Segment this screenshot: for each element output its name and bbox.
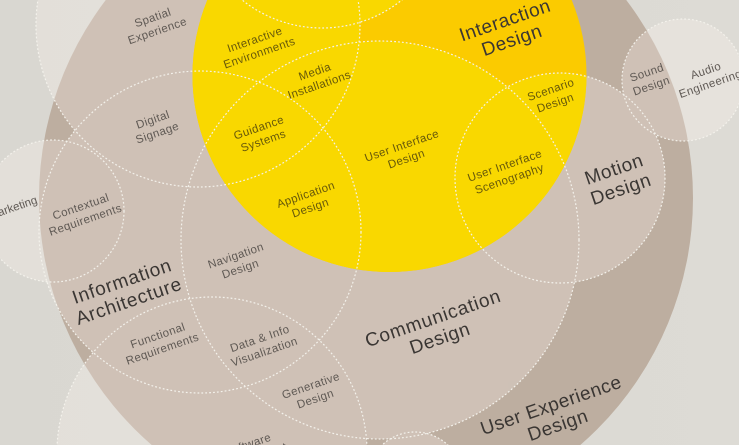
- label: Sound Design: [627, 61, 672, 98]
- label: Generative Design: Generative: [281, 371, 341, 402]
- label: Communication Design: Communication: [362, 286, 504, 352]
- circle: Interaction Design yellow: [192, 0, 586, 272]
- label: Interactive Environments: Interactive: [226, 25, 284, 55]
- label: Navigation Design: [207, 241, 270, 285]
- label: Generative Design: [281, 371, 346, 415]
- label: Spatial Experience: Spatial: [133, 6, 173, 30]
- label: Contextual Requirements: Contextual: [51, 192, 111, 223]
- label: Guidance Systems: [232, 114, 290, 156]
- label: Information Architecture: [66, 254, 185, 330]
- label: Interaction Design: Design: [479, 21, 545, 61]
- label: Spatial Experience: Experience: [127, 16, 189, 47]
- label: Data & Info Visualization: [225, 322, 299, 370]
- label: Contextual Requirements: [43, 189, 124, 239]
- label: User Interface Design: User Interface: [363, 128, 441, 165]
- label: User Interface Scenography: Scenography: [474, 162, 546, 197]
- label: Interaction Design: [457, 0, 561, 66]
- label: Media Installations: [282, 56, 353, 102]
- label: Interactive Environments: [218, 22, 297, 71]
- label: Data & Info Visualization: Data & Info: [229, 324, 291, 355]
- label: Scenario Design: Scenario: [526, 77, 576, 104]
- label: Sound Design: Sound: [628, 62, 666, 85]
- label: Digital Signage: Digital: [135, 109, 171, 132]
- label: Functional Requirements: Requirements: [125, 331, 201, 368]
- label: Scenario Design: Design: [536, 92, 576, 115]
- label: Media Installations: Installations: [286, 69, 353, 102]
- label: User Experience Design: User Experience: [478, 372, 625, 440]
- label: Software Development: [212, 428, 289, 445]
- label: Digital Signage: Signage: [134, 121, 181, 147]
- label: Application Design: Application: [275, 180, 337, 211]
- label: Navigation Design: Navigation: [207, 241, 266, 271]
- label: Generative Design: Design: [296, 388, 336, 411]
- label: Functional Requirements: Functional: [129, 321, 187, 351]
- label: Motion Design: [581, 150, 654, 210]
- label: Communication Design: Design: [407, 319, 473, 359]
- label: Application Design: Design: [291, 197, 331, 220]
- label: Functional Requirements: [120, 318, 201, 368]
- label: User Experience Design: Design: [525, 406, 591, 445]
- label: User Interface Scenography: [466, 148, 548, 198]
- label: Data & Info Visualization: Visualization: [230, 336, 299, 370]
- label: Contextual Requirements: Requirements: [48, 202, 124, 239]
- label: User Interface Design: [363, 128, 445, 178]
- label: Spatial Experience: [122, 3, 189, 47]
- label: Motion Design: Design: [588, 170, 654, 210]
- label: Sound Design: Design: [632, 75, 672, 98]
- label: User Interface Design: Design: [387, 148, 427, 171]
- label: Guidance Systems: Guidance: [232, 114, 286, 143]
- label: Motion Design: Motion: [582, 150, 646, 190]
- label: Scenario Design: [526, 77, 581, 117]
- label: Application Design: [275, 180, 341, 224]
- label: Information Architecture: Architecture: [73, 274, 185, 330]
- label: Guidance Systems: Systems: [239, 128, 288, 155]
- label: Audio Engineering: Audio: [689, 61, 723, 82]
- label: User Interface Scenography: User Interface: [466, 148, 544, 185]
- label: Audio Engineering: [673, 55, 739, 101]
- label: Navigation Design: Design: [221, 258, 261, 281]
- label: Media Installations: Media: [297, 61, 333, 83]
- label: Digital Signage: [130, 107, 181, 147]
- label: Interactive Environments: Environments: [222, 36, 297, 71]
- label: Information Architecture: Information: [70, 255, 175, 309]
